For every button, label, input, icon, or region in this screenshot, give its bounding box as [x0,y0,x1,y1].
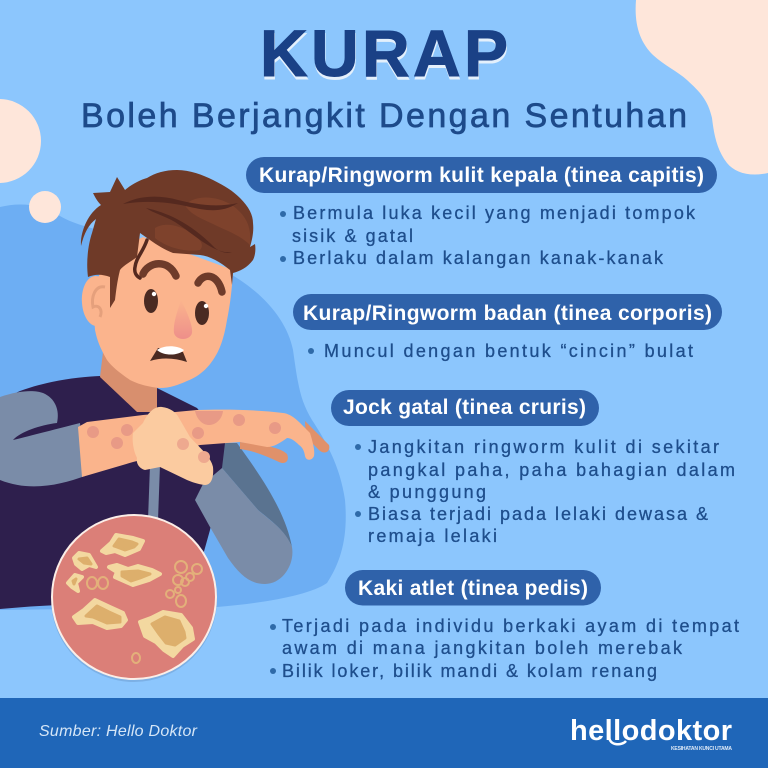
pill heading: Jock gatal (tinea cruris) [343,396,586,419]
back fingers [240,421,329,463]
title: KURAP [260,19,508,93]
curl lock [135,240,147,278]
bullet text: pangkal paha, paha bahagian dalam [368,460,735,480]
bullet text: Biasa terjadi pada lelaki dewasa & [368,504,708,524]
background circle: small peach [29,191,61,223]
right sleeve, shaded part [222,443,292,547]
left sleeve [0,391,85,486]
forearm [78,410,314,477]
pill heading [345,570,601,606]
eyes [144,289,209,325]
hair [81,170,255,308]
nose [174,300,192,339]
character: worried man with rash [0,170,329,609]
skin patches inner [73,539,185,645]
section: jock gatal [331,390,735,546]
pill heading: Kurap/Ringworm kulit kepala (tinea capitis) [259,164,704,187]
bullet text: Muncul dengan bentuk “cincin” bulat [324,341,693,361]
bullet text: sisik & gatal [292,226,413,246]
pill heading [331,390,599,426]
bullet text: Bilik loker, bilik mandi & kolam renang [282,661,657,681]
bullet text: awam di mana jangkitan boleh merebak [282,638,683,658]
bullet text: Jangkitan ringworm kulit di sekitar [368,437,719,457]
background blob: top right peach [636,0,768,175]
bullet text: Berlaku dalam kalangan kanak-kanak [293,248,664,268]
rash spots on hand [177,438,210,463]
pill heading [246,157,717,193]
skin rings [87,561,202,663]
bullet text [270,616,739,681]
rash spots on arm [87,411,281,449]
logo: hellodoktor: hellodoktor [570,715,732,747]
section: kulit kepala [246,157,717,268]
bullet text [355,437,735,546]
subtitle: Boleh Berjangkit Dengan Sentuhan [81,97,687,135]
bullet text [280,203,696,268]
hair dark strands [123,197,238,253]
right sleeve, lit part [195,468,292,584]
pill heading: Kaki atlet (tinea pedis) [358,577,588,600]
title: KURAP [260,16,508,90]
bullet text: Bermula luka kecil yang menjadi tompok [293,203,696,223]
magnified skin circle [51,515,217,682]
shirt [0,376,226,609]
neck [100,352,157,412]
hair highlights [155,198,250,251]
pill heading: Kurap/Ringworm badan (tinea corporis) [303,302,712,325]
bullet text: Terjadi pada individu berkaki ayam di tempat [282,616,739,636]
holding hand [133,407,213,485]
background blob: darker blue behind character [0,204,346,610]
zip cord [148,465,160,520]
eyebrows [143,264,222,292]
background circle: left peach [0,99,41,183]
pill heading [293,294,722,330]
ear [82,276,112,326]
mouth [150,346,187,362]
footer band [0,698,768,768]
bullet text: & punggung [368,482,486,502]
logo: hellodoktor: KESIHATAN KUNCI UTAMA [671,746,732,752]
skin patches outer [68,535,193,656]
bullet text: remaja lelaki [368,526,497,546]
source credit: Sumber: Hello Doktor [39,723,198,740]
face [92,237,233,388]
section: kaki atlet [270,570,739,681]
section: badan [293,294,722,361]
